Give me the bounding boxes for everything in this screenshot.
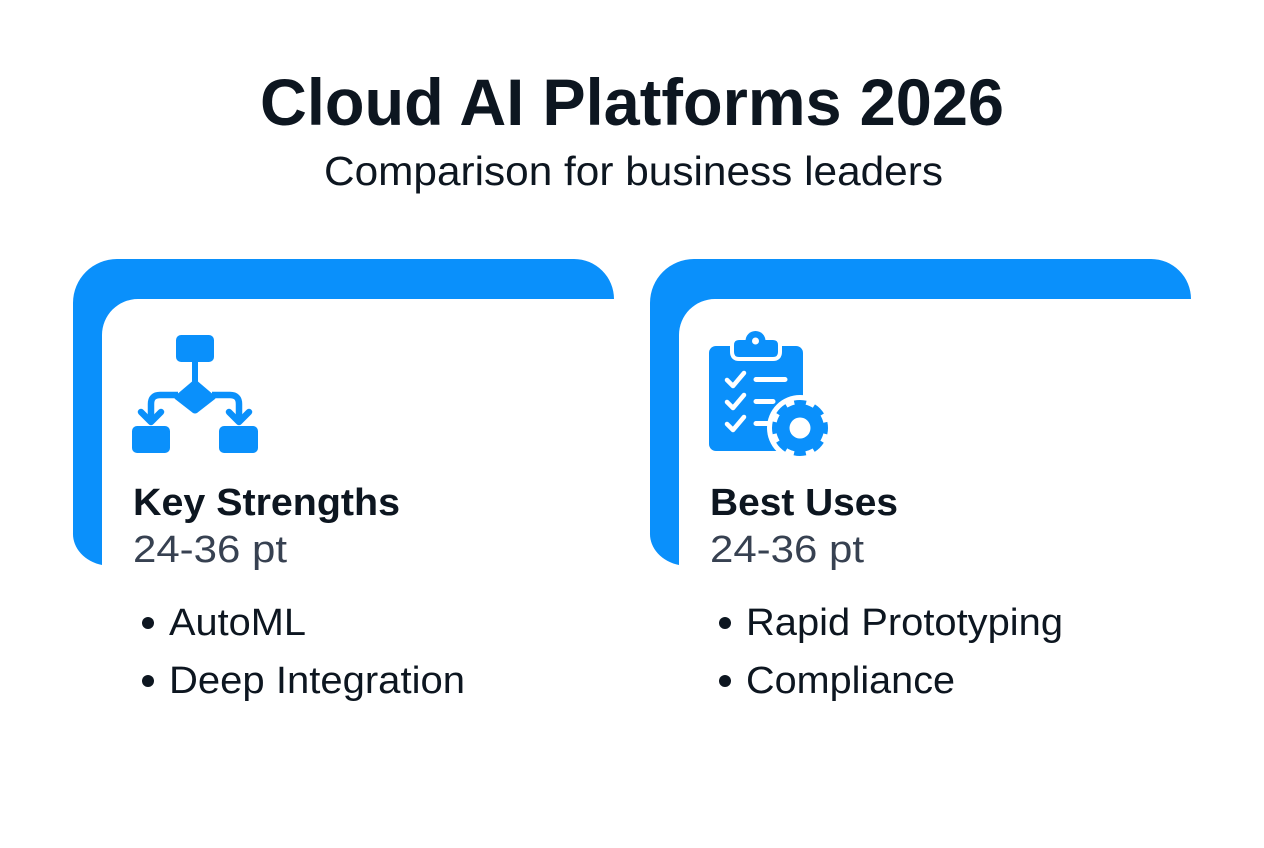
bullet list	[142, 602, 465, 702]
bullet list: Compliance	[746, 660, 955, 702]
bullet list	[719, 602, 1063, 702]
size note: 24-36 pt	[133, 529, 287, 571]
panel: best uses	[650, 259, 1191, 702]
panel: key strengths	[73, 259, 614, 702]
icon: decision flowchart	[132, 335, 258, 453]
icon: clipboard checklist with gear	[709, 331, 833, 461]
bullet list: AutoML	[169, 602, 306, 644]
panel accent bracket	[650, 259, 1191, 565]
subtitle: Comparison for business leaders	[324, 148, 943, 194]
heading: best uses: Best Uses	[710, 482, 898, 524]
panel accent bracket	[73, 259, 614, 565]
heading: key strengths: Key Strengths	[133, 482, 400, 524]
bullet list: Rapid Prototyping	[746, 602, 1063, 644]
size note: 24-36 pt	[710, 529, 864, 571]
title: Cloud AI Platforms 2026	[260, 65, 1004, 139]
bullet list: Deep Integration	[169, 660, 465, 702]
